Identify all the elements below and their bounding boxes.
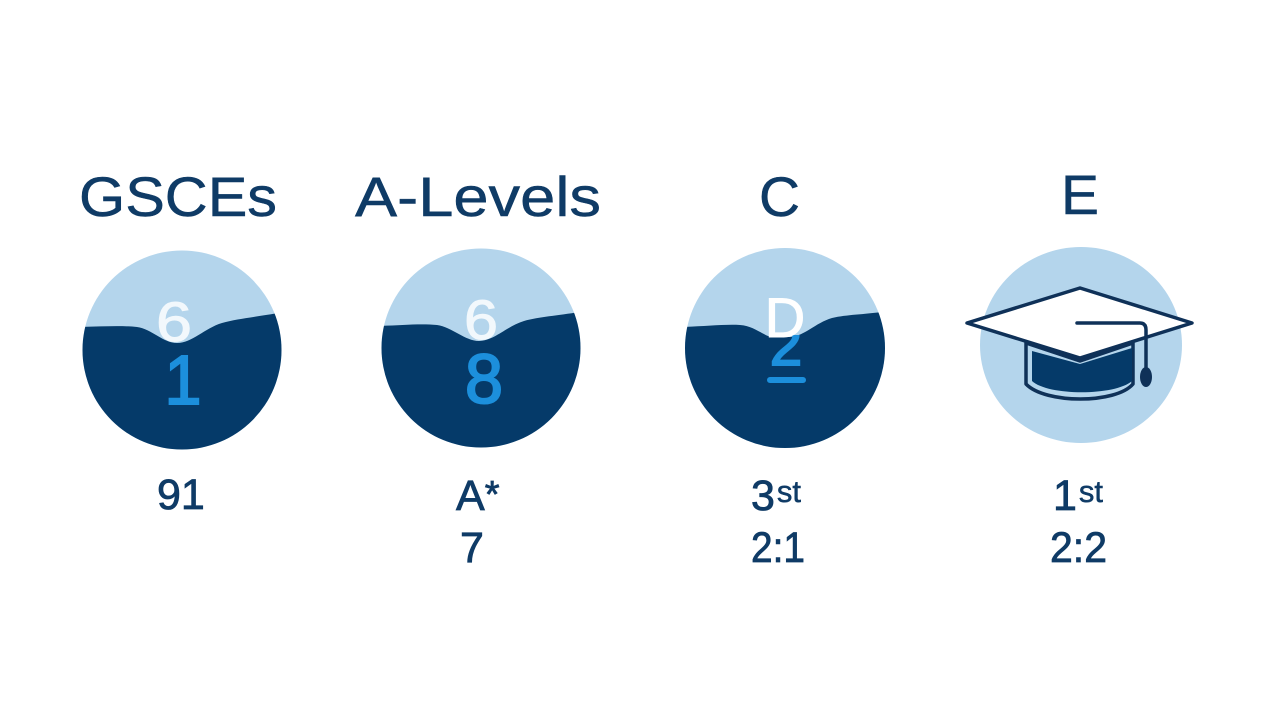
grade label: 2:1: 2:1 [751,524,805,572]
infographic canvas [82,175,1194,563]
grade label: 91: 91 [157,471,205,519]
icon: C wave circle [685,248,885,448]
grade label: 3rd class: st [777,474,801,509]
cap tassel [1077,323,1152,387]
heading: E: E [1061,163,1099,226]
grade label: 1st class: 1 [1053,472,1077,520]
cap board [967,288,1192,358]
icon: GSCEs wave circle: 6 [156,290,192,353]
grade label: 1st class: st [1079,474,1103,509]
grade label: A*: A [456,472,485,520]
cap base [1026,343,1133,399]
grade label: 3rd class: 3 [751,472,775,520]
icon: C wave circle: 2 [770,313,802,378]
grade label: A*: * [485,474,500,516]
icon: GSCEs wave circle [82,250,282,450]
grade label: 7: 7 [460,524,484,572]
grade label: 2:2: 2:2 [1050,524,1107,572]
heading: A-Levels: A-Levels [355,165,601,228]
heading: C: C [759,165,800,228]
icon: GSCEs wave circle: 1 [164,341,202,419]
icon: A-Levels wave circle: 8 [465,340,503,418]
icon: graduation cap circle [967,247,1192,443]
icon: C wave circle: D [765,286,805,349]
icon: A-Levels wave circle [382,248,580,448]
icon: A-Levels wave circle: 6 [464,288,498,351]
heading: GSCEs: GSCEs [79,165,277,228]
